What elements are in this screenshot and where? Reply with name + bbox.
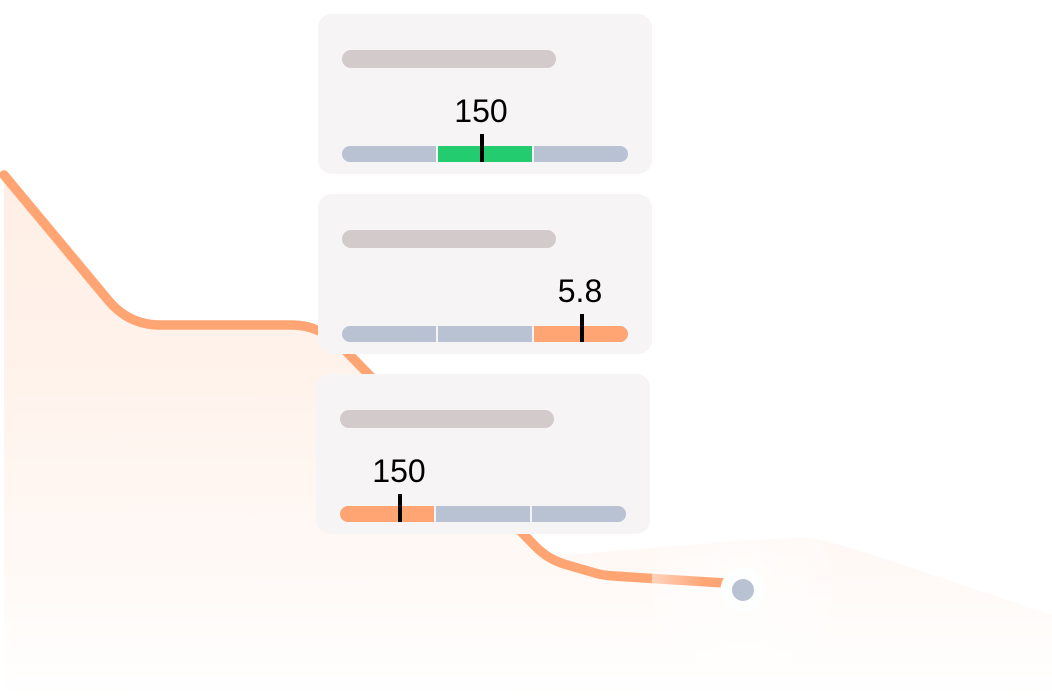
value: 150: 150 bbox=[372, 453, 426, 489]
panel: card three bbox=[316, 374, 650, 534]
panel: card two bbox=[318, 194, 652, 354]
chart: end point halo bbox=[653, 500, 833, 680]
chart: fading line segment bbox=[652, 578, 725, 583]
value marker bbox=[398, 494, 402, 522]
range bar bbox=[342, 326, 628, 342]
chart: end point marker bbox=[720, 568, 766, 612]
range bar bbox=[340, 506, 626, 522]
label placeholder bar bbox=[342, 230, 556, 248]
value: 5.8: 5.8 bbox=[558, 273, 602, 309]
chart: area fill under trend line bbox=[4, 175, 1052, 700]
chart: orange trend line bbox=[4, 175, 652, 578]
value: 150: 150 bbox=[454, 93, 508, 129]
range bar bbox=[342, 146, 628, 162]
value marker bbox=[480, 134, 484, 162]
value marker bbox=[580, 314, 584, 342]
label placeholder bar bbox=[340, 410, 554, 428]
panel: card one bbox=[318, 14, 652, 174]
label placeholder bar bbox=[342, 50, 556, 68]
